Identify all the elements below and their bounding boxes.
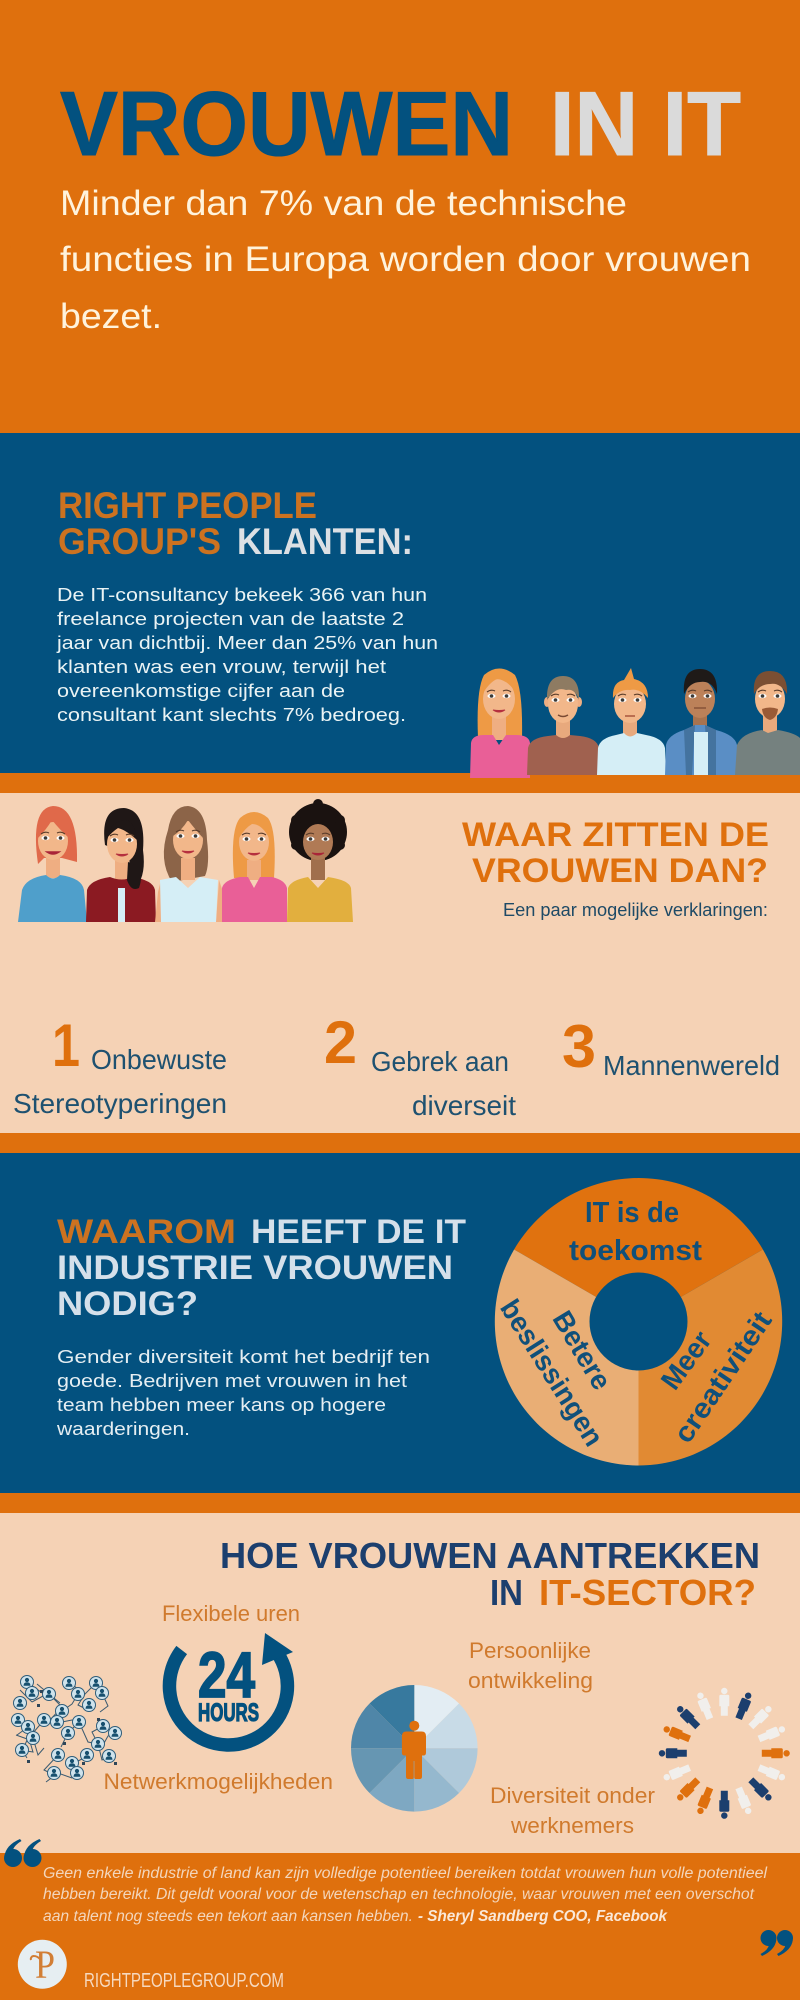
slice label: IT is de toekomst: IT is de (585, 1197, 679, 1229)
slice label: meer creativiteit: Meer (655, 1325, 718, 1395)
slice label: betere beslissingen: beslissingen (494, 1294, 610, 1452)
icon: ring of employees (659, 1688, 790, 1819)
panel background: quote and footer (0, 1853, 800, 2000)
icon: opening quote mark (4, 1839, 42, 1867)
title: IN IT (550, 74, 741, 175)
heading: waarom: NODIG? (57, 1285, 198, 1323)
illustration: group of consultants (470, 668, 800, 778)
person: man in brown shirt (527, 676, 600, 775)
illustration: group of women (18, 799, 353, 922)
reason 1 (13, 1012, 227, 1119)
text block: IT-consultancy: jaar van dichtbij. Meer dan 25% van hun (56, 633, 438, 653)
heading: waar zitten de vrouwen dan: WAAR ZITTEN DE (462, 816, 769, 854)
heading: right people group's klanten: KLANTEN: (237, 521, 413, 562)
heading: right people group's klanten: RIGHT PEOPLE (58, 485, 317, 526)
subtitle: bezet. (60, 297, 162, 336)
reason 1: Onbewuste (91, 1044, 227, 1075)
reason 2: 2 (324, 1009, 357, 1076)
text block: IT-consultancy: consultant kant slechts 7% bedroeg. (57, 705, 406, 725)
website: RIGHTPEOPLEGROUP.COM (84, 1970, 284, 1992)
text block: gender diversiteit: waarderingen. (56, 1419, 190, 1439)
heading: hoe vrouwen aantrekken: HOE VROUWEN AANTREKKEN (220, 1535, 760, 1576)
label: diversiteit onder werknemers: Diversiteit onder (490, 1783, 655, 1808)
heading: waarom: INDUSTRIE VROUWEN (57, 1249, 453, 1287)
reason 3: Mannenwereld (603, 1050, 780, 1081)
title (60, 74, 741, 175)
person: dark-haired woman in red (86, 808, 156, 922)
reason 3: 3 (562, 1013, 596, 1080)
reason 1: 1 (52, 1012, 80, 1079)
slice label: meer creativiteit: creativiteit (668, 1306, 778, 1448)
subheading: mogelijke verklaringen: Een paar mogelijke verklaringen: (503, 900, 768, 920)
heading: hoe vrouwen aantrekken: IN (490, 1572, 523, 1613)
icon: pie with person (351, 1685, 478, 1812)
label: netwerkmogelijkheden: Netwerkmogelijkheden (104, 1769, 333, 1794)
heading: waar zitten de vrouwen dan: VROUWEN DAN? (472, 852, 768, 890)
header panel background (0, 0, 800, 433)
person: blonde woman in pink (222, 812, 287, 922)
logo: P (35, 1942, 55, 1987)
label: diversiteit onder werknemers (490, 1783, 655, 1838)
slice label: IT is de toekomst: toekomst (569, 1235, 702, 1267)
person: curly-haired woman in yellow (287, 799, 353, 922)
person: blonde woman in pink (470, 668, 530, 778)
text block: IT-consultancy: De IT-consultancy bekeek 366 van hun (57, 585, 427, 605)
icon: closing quote mark (760, 1930, 793, 1956)
text block: IT-consultancy: klanten was een vrouw, terwijl het (57, 657, 386, 677)
heading: waarom: WAAROM (57, 1213, 236, 1251)
panel background: waar zitten de vrouwen (0, 793, 800, 1133)
person: red-haired woman in blue (18, 806, 87, 922)
heading: hoe vrouwen aantrekken (220, 1535, 760, 1613)
quote text: hebben bereikt. Dit geldt vooral voor de wetenschap en technologie, waar vrouwen met een overschot (43, 1886, 755, 1903)
person: brown-haired woman in pale top (155, 806, 224, 922)
text block: gender diversiteit: goede. Bedrijven met vrouwen in het (57, 1371, 407, 1391)
label: persoonlijke ontwikkeling: Persoonlijke (469, 1638, 591, 1663)
subtitle (60, 184, 751, 336)
heading: right people group's klanten: GROUP'S (58, 521, 221, 562)
panel background: waarom (0, 1153, 800, 1493)
icon: 24 hours (169, 1633, 293, 1745)
reason 1: Stereotyperingen (13, 1088, 227, 1119)
orange divider band 2 (0, 1133, 800, 1153)
quote text: Geen enkele industrie of land kan zijn volledige potentieel bereiken totdat vrouwen hun volle potentieel (43, 1865, 768, 1882)
label: diversiteit onder werknemers: werknemers (510, 1813, 634, 1838)
orange divider band 1 (0, 773, 800, 793)
icon: 24 hours: HOURS (198, 1699, 259, 1727)
panel background: klanten (0, 433, 800, 773)
text block: gender diversiteit (56, 1347, 430, 1439)
text block: IT-consultancy: overeenkomstige cijfer aan de (57, 681, 345, 701)
slice label: betere beslissingen: Betere (547, 1305, 617, 1395)
icon: network (12, 1676, 122, 1782)
reason 2 (324, 1009, 516, 1121)
reason 2: Gebrek aan (371, 1046, 509, 1077)
label: flexibele uren: Flexibele uren (162, 1601, 300, 1626)
person: man in denim jacket (665, 669, 737, 775)
heading: hoe vrouwen aantrekken: IT-SECTOR? (539, 1572, 756, 1613)
slice label: IT is de toekomst (569, 1197, 702, 1267)
icon: 24 hours: 24 (198, 1639, 255, 1711)
person: man in light shirt (597, 668, 666, 775)
text block: gender diversiteit: team hebben meer kans op hogere (57, 1395, 386, 1415)
heading: waarom: HEEFT DE IT (251, 1213, 466, 1251)
heading: right people group's klanten (58, 485, 413, 562)
logo (18, 1940, 67, 1989)
text block: IT-consultancy: freelance projecten van de laatste 2 (57, 609, 404, 629)
label: persoonlijke ontwikkeling: ontwikkeling (468, 1668, 593, 1693)
reason 3 (562, 1013, 780, 1081)
label: persoonlijke ontwikkeling (468, 1638, 593, 1693)
quote text: - Sheryl Sandberg COO, Facebook (418, 1908, 668, 1925)
quote text: aan talent nog steeds een tekort aan kansen hebben. (43, 1908, 413, 1925)
title: VROUWEN (60, 74, 513, 175)
panel background: hoe aantrekken (0, 1513, 800, 1853)
text block: IT-consultancy (56, 585, 438, 725)
quote text (43, 1865, 768, 1925)
subtitle: Minder dan 7% van de technische (60, 184, 627, 223)
text block: gender diversiteit: Gender diversiteit komt het bedrijf ten (57, 1347, 430, 1367)
heading: waarom (57, 1213, 466, 1323)
subtitle: functies in Europa worden door vrouwen (60, 240, 751, 279)
donut chart (494, 1178, 782, 1466)
orange divider band 3 (0, 1493, 800, 1513)
person: man in grey shirt (735, 671, 800, 775)
reason 2: diverseit (412, 1090, 516, 1121)
heading: waar zitten de vrouwen dan (462, 816, 769, 890)
